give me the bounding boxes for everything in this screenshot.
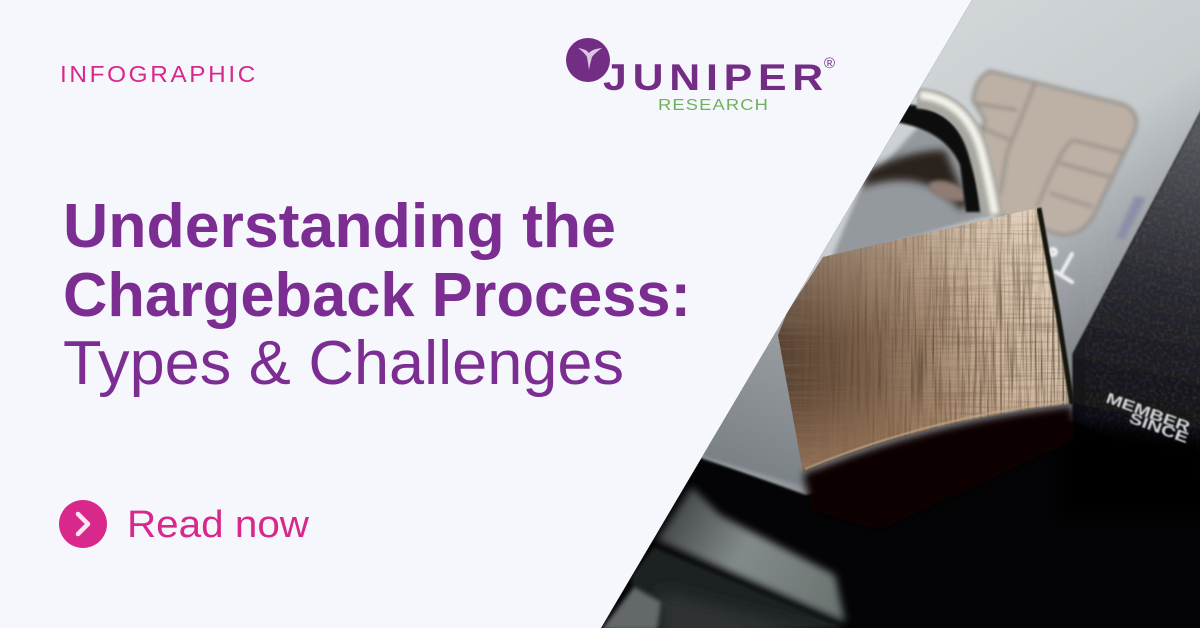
shadow inside shackle: [895, 104, 980, 212]
lower-left lower panel: [658, 594, 814, 628]
dark blotch under shackle: [860, 150, 968, 210]
credit card surface: [660, 0, 1200, 495]
title line 2: Chargeback Process:: [63, 261, 691, 330]
pink blob beside shackle: [928, 178, 965, 204]
member since card text: [1106, 392, 1190, 444]
title: [63, 192, 691, 398]
logo icon: [566, 38, 610, 82]
faint card hologram strip: [1116, 196, 1146, 240]
title line 1: Understanding the: [63, 192, 616, 261]
call to action label: Read now: [127, 504, 310, 546]
lower-left grey stripe: [657, 487, 845, 622]
icon: arrow button: [59, 500, 107, 548]
brushed texture: [775, 205, 1075, 475]
area beneath shackle: [830, 125, 990, 262]
title line 3: Types & Challenges: [63, 329, 624, 398]
dark card stack on right: [1070, 110, 1200, 439]
padlock dark right side: [1039, 208, 1072, 404]
padlock underside shadow: [803, 406, 1075, 530]
logo registered mark: ®: [824, 55, 835, 72]
black photo base: [600, 0, 1200, 628]
padlock bright lower edge: [805, 402, 1067, 469]
padlock shackle highlight: [920, 95, 995, 214]
member since card text: MEMBER: [1104, 390, 1192, 436]
speckle on dark card: [1085, 125, 1200, 450]
grey card area left of padlock: [701, 289, 818, 486]
logo: Juniper Research: [566, 38, 835, 114]
padlock shackle: [917, 98, 993, 214]
logo subtitle: RESEARCH: [658, 97, 769, 114]
card emboss digits: [1048, 246, 1075, 285]
shadow below dark card: [1070, 416, 1200, 476]
label: infographic: INFOGRAPHIC: [60, 61, 258, 87]
lower-left dark band: [631, 547, 845, 628]
chip: [940, 71, 1136, 235]
logo wordmark: JUNIPER: [603, 57, 829, 98]
padlock body: [775, 205, 1075, 475]
call to action: read now: [59, 500, 310, 548]
lower-left card corner: [601, 587, 661, 628]
member since card text: SINCE: [1127, 410, 1191, 447]
photo: padlock on credit card: [600, 0, 1200, 628]
